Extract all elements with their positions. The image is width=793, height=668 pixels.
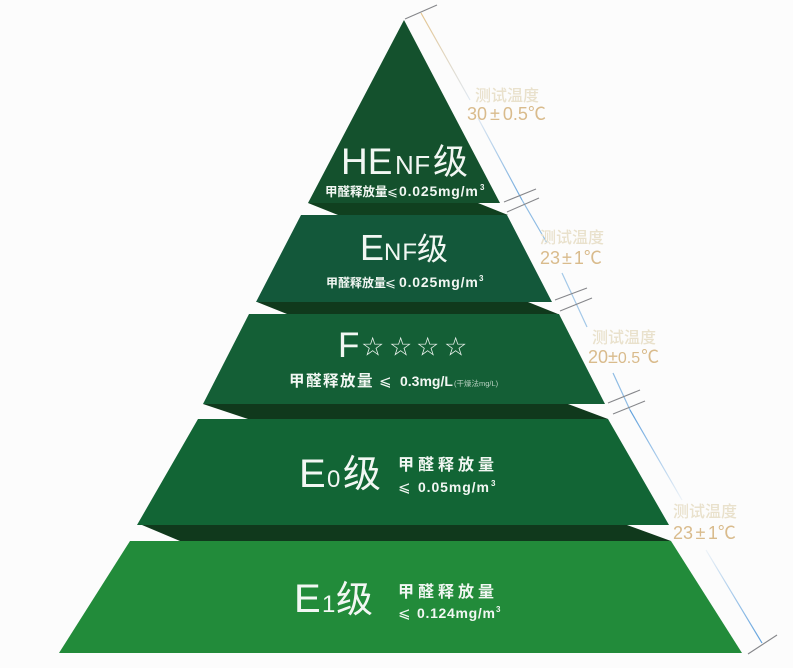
tier: E0 xyxy=(137,419,669,525)
tier: E1: ⩽ xyxy=(398,604,411,622)
temperature label: 23±1℃ upper: 23±1℃ xyxy=(540,248,602,268)
connector band: F to E0 xyxy=(203,404,608,419)
tier title: E0: E xyxy=(299,452,326,496)
connector band: E0 to E1 xyxy=(142,525,671,541)
temperature label: 23±1℃ upper xyxy=(540,228,604,268)
tier limit: F four stars: ⩽ xyxy=(379,372,392,390)
tier: E0: 3 xyxy=(491,479,496,488)
tier limit: E1: 甲醛释放量 xyxy=(398,583,498,601)
tier limit: F four stars: (干燥法mg/L) xyxy=(454,378,499,388)
tier limit: F four stars: 甲醛释放量 xyxy=(289,373,374,390)
tier limit: HENF: 甲醛释放量 xyxy=(325,185,388,199)
tier title: ENF: 级 xyxy=(417,232,448,267)
temperature label: 30±0.5℃ xyxy=(467,86,546,124)
temperature label: 30±0.5℃: 30±0.5℃ xyxy=(467,104,546,124)
tier title: F four stars: ☆☆☆☆ xyxy=(361,332,467,362)
temperature label: 23±1℃ lower: 23±1℃ xyxy=(673,523,736,543)
temperature label: 20±0.5℃ xyxy=(588,328,659,367)
tier limit: ENF: 3 xyxy=(479,274,484,283)
temperature label: 23±1℃ lower: 测试温度 xyxy=(673,502,737,521)
tier: E1: 0.124mg/m xyxy=(417,605,496,621)
tier title: E1: E xyxy=(294,577,321,621)
tier title: HENF: HE xyxy=(341,141,392,182)
tier title: E1: 1 xyxy=(322,591,335,618)
tier: E0: 0.05mg/m xyxy=(418,479,490,495)
tier limit: ENF: 甲醛释放量 xyxy=(326,276,386,290)
tier: HENF xyxy=(308,20,500,203)
tier limit: HENF: 3 xyxy=(480,183,485,192)
tier title: HENF: 级 xyxy=(433,143,468,182)
temperature label: 23±1℃ upper: 测试温度 xyxy=(540,228,604,247)
temperature label: 20±0.5℃: 20±0.5℃ xyxy=(588,347,659,367)
temperature axis line xyxy=(421,13,762,643)
tier: E1: 3 xyxy=(496,605,501,614)
tier title: ENF: NF xyxy=(384,239,418,266)
tier: ENF xyxy=(256,215,552,302)
axis tick marks xyxy=(405,5,777,654)
tier limit: HENF: ⩽ xyxy=(387,185,398,200)
temperature label: 23±1℃ lower xyxy=(673,502,737,543)
tier limit: ENF: ⩽ xyxy=(385,276,396,291)
connector band: ENF to F xyxy=(257,302,558,314)
tier title: ENF: E xyxy=(360,227,384,268)
tier title: HENF: NF xyxy=(395,150,431,180)
tier: E0: ⩽ xyxy=(398,478,411,496)
tier title: E0: 级 xyxy=(343,454,381,496)
tier title: E0: 0 xyxy=(327,466,340,493)
tier title: E1: 级 xyxy=(336,579,373,620)
tier limit: E0: 甲醛释放量 xyxy=(398,456,498,474)
tier: E1 xyxy=(59,541,742,653)
tier limit: HENF: 0.025mg/m xyxy=(399,183,479,199)
tier: F four stars xyxy=(203,314,605,404)
tier limit: F four stars: 0.3mg/L xyxy=(400,373,453,389)
connector band: HENF to ENF xyxy=(308,203,508,215)
tier title: F four stars: F xyxy=(338,326,359,365)
temperature label: 20±0.5℃: 测试温度 xyxy=(592,328,656,347)
temperature label: 30±0.5℃: 测试温度 xyxy=(475,86,539,105)
tier limit: ENF: 0.025mg/m xyxy=(399,274,479,290)
